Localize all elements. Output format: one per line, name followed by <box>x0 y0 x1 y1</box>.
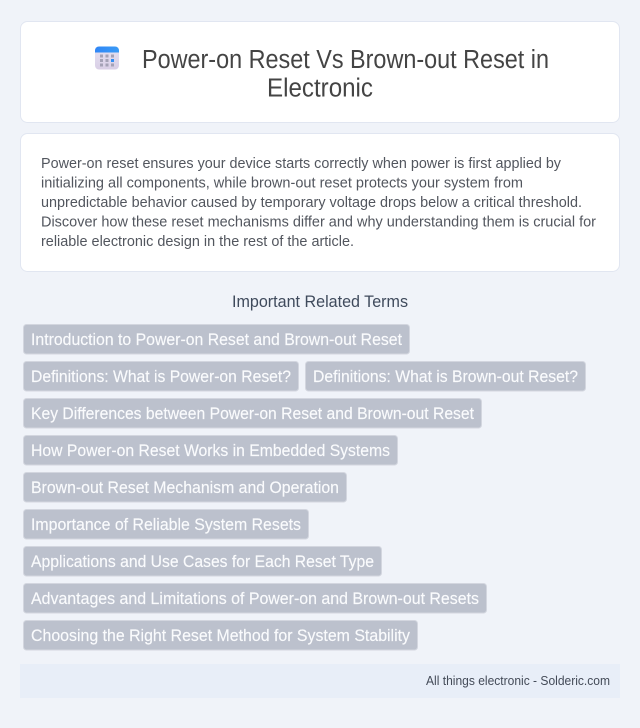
description text <box>41 155 596 250</box>
tag: Importance of Reliable System Resets <box>31 515 301 534</box>
tag <box>24 584 486 613</box>
footer: All things electronic - Solderic.com <box>426 674 610 688</box>
tag <box>24 436 398 465</box>
tag <box>24 398 482 428</box>
tag <box>24 510 308 539</box>
heading: important related terms: Important Related Terms <box>232 292 408 311</box>
tag: Introduction to Power-on Reset and Brown-out Reset <box>31 330 402 349</box>
footer <box>20 664 620 698</box>
description text: Discover how these reset mechanisms differ and why understanding them is crucial for <box>41 214 596 230</box>
tag <box>24 324 410 354</box>
tag <box>24 362 298 391</box>
title <box>142 46 549 102</box>
panel: header <box>20 22 620 122</box>
description text: initializing all components, while brown-out reset protects your system from <box>41 174 523 192</box>
tag <box>306 362 586 391</box>
tag <box>24 620 418 650</box>
tag: Definitions: What is Power-on Reset? <box>31 367 291 386</box>
tag: Brown-out Reset Mechanism and Operation <box>31 478 339 497</box>
tag: Applications and Use Cases for Each Reset Type <box>31 552 374 571</box>
description text: unpredictable behavior caused by temporary voltage drops below a critical threshold. <box>41 194 582 211</box>
tag: How Power-on Reset Works in Embedded Systems <box>31 441 390 460</box>
title: Electronic <box>267 74 373 102</box>
tag <box>24 472 346 502</box>
panel: description <box>20 134 620 272</box>
description text: Power-on reset ensures your device starts correctly when power is first applied by <box>41 155 561 172</box>
title: Power-on Reset Vs Brown-out Reset in <box>142 46 549 74</box>
tag: Definitions: What is Brown-out Reset? <box>313 367 578 386</box>
tag: Choosing the Right Reset Method for System Stability <box>31 626 411 645</box>
description text: reliable electronic design in the rest of the article. <box>41 233 354 250</box>
icon: calendar <box>95 46 119 70</box>
tag <box>24 546 382 576</box>
tag list <box>24 324 586 650</box>
tag: Advantages and Limitations of Power-on and Brown-out Resets <box>31 589 479 608</box>
tag: Key Differences between Power-on Reset and Brown-out Reset <box>31 404 474 423</box>
